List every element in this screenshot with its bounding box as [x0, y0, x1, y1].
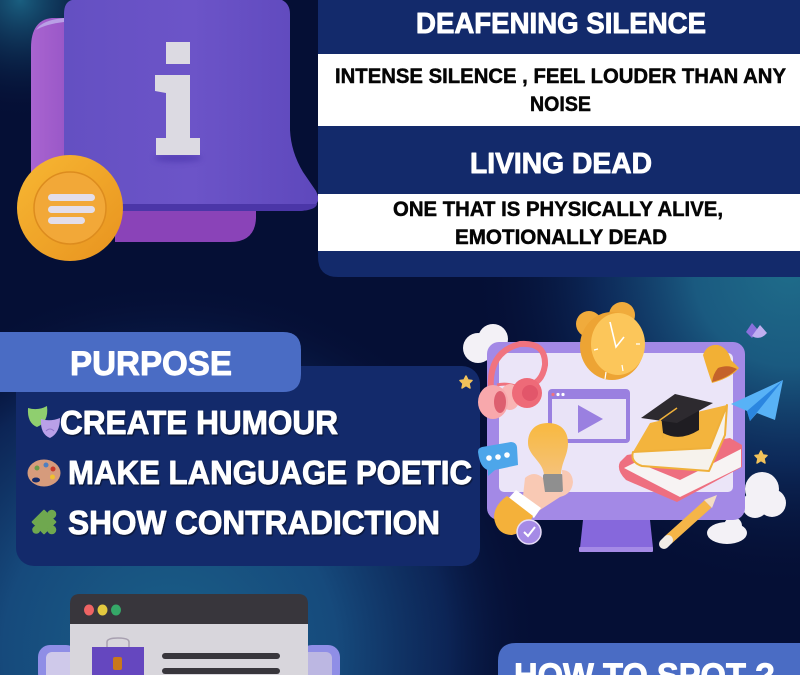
monitor — [487, 342, 745, 520]
pencil — [664, 495, 717, 544]
panel: definitions — [318, 0, 800, 277]
icon: palette — [28, 460, 60, 486]
list item: make language poetic: MAKE LANGUAGE POETIC — [68, 454, 472, 491]
icon: theatre masks — [28, 406, 60, 438]
panel: purpose — [0, 332, 480, 566]
video window — [548, 389, 630, 443]
heading: purpose: PURPOSE — [70, 345, 232, 383]
clouds — [463, 324, 786, 544]
definition row: deafening silence — [318, 54, 800, 126]
paper plane — [731, 380, 783, 421]
panel: how to spot — [498, 643, 800, 675]
definition row: living dead: ONE THAT IS PHYSICALLY ALIVE, — [393, 197, 723, 221]
small gem — [746, 323, 767, 338]
definition row: living dead — [318, 194, 800, 251]
heading: living dead: LIVING DEAD — [470, 148, 652, 180]
illustration: browser window — [38, 594, 340, 675]
definition row: living dead: EMOTIONALLY DEAD — [455, 225, 667, 249]
definition row: deafening silence: INTENSE SILENCE , FEEL LOUDER THAN ANY — [335, 64, 786, 88]
icon: puzzle piece — [27, 505, 66, 544]
chat bubble — [478, 442, 518, 476]
definition row: deafening silence: NOISE — [530, 92, 591, 116]
purpose tab — [0, 332, 301, 392]
bell — [703, 345, 739, 383]
alarm clock — [576, 302, 645, 380]
headphones — [478, 344, 545, 419]
list item: show contradiction: SHOW CONTRADICTION — [68, 504, 440, 541]
icon: briefcase — [92, 638, 144, 675]
heading: deafening silence: DEAFENING SILENCE — [416, 8, 706, 40]
illustration: learning monitor — [460, 302, 786, 552]
hand with lightbulb — [494, 423, 573, 544]
stars — [460, 376, 767, 463]
list item: create humour: CREATE HUMOUR — [60, 404, 338, 441]
books and cap — [619, 394, 742, 502]
icon: info bell — [17, 0, 318, 261]
